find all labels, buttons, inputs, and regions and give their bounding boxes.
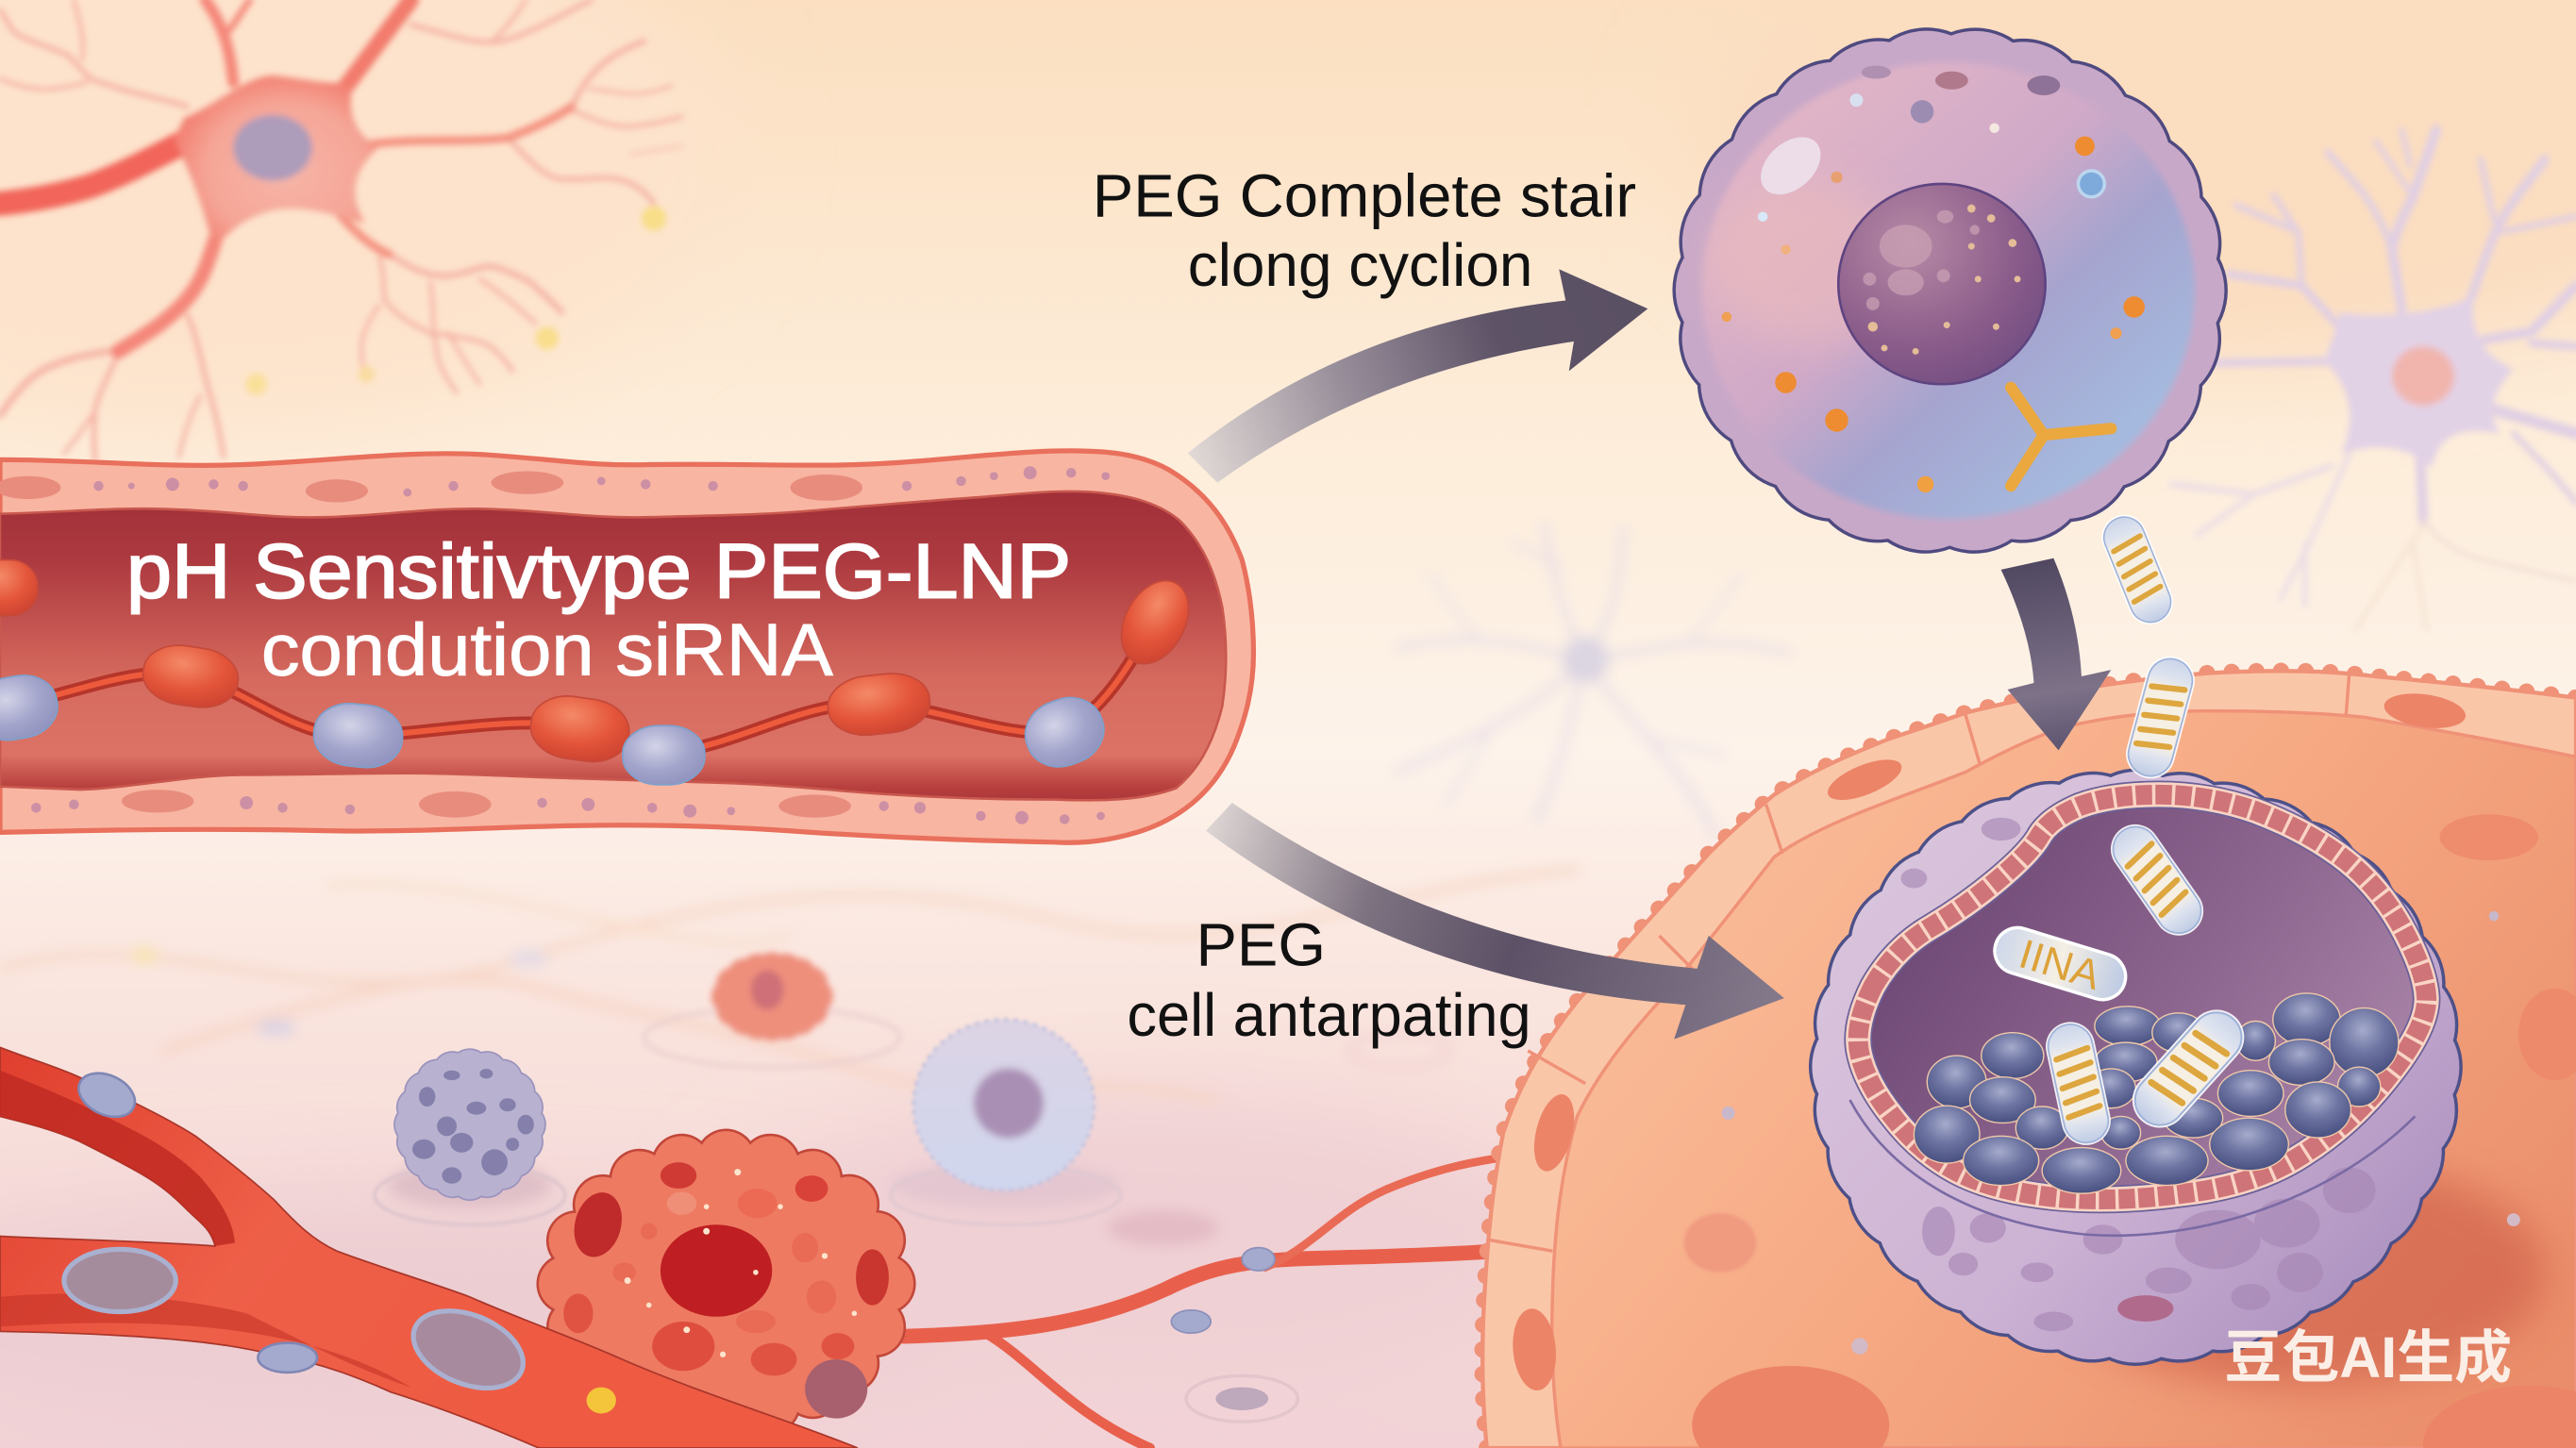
label: PEG cell antarpating: cell antarpating [1127,981,1531,1049]
vesicle outer wall [1856,818,2415,1331]
cell: orange background [644,960,900,1067]
capillary bubble [402,1296,534,1403]
organelles [1722,66,2145,492]
vesicle cavity [1858,794,2427,1200]
bead: blue [1016,688,1112,776]
vessel lumen [0,491,1226,800]
capsule: siRNA on spheres left [2041,1018,2116,1150]
vessel wall [0,451,1253,842]
capsule: siRNA on spheres right [2121,998,2255,1140]
capsule: siRNA in cavity [2101,815,2213,945]
cell: grey [375,1062,565,1224]
capillary bubble [64,1249,176,1312]
central pore [661,1224,772,1317]
membrane cell nuclei [1510,689,2538,1392]
bead: blue [0,670,62,746]
arrow: to target cell [1206,803,1784,1040]
main capillary [0,1047,858,1448]
bead: red [140,641,242,712]
cell body [1482,671,2576,1448]
target cell [1482,651,2576,1448]
arrow: to macrophage [1188,269,1648,483]
membrane scallops [1482,671,2576,1448]
siRNA strand [0,559,1202,785]
heading: condution siRNA [261,607,833,691]
label: PEG cell antarpating: PEG [1196,910,1326,978]
neuron: top left [0,0,682,459]
membrane dividers [1487,674,2350,1251]
cytoplasm [1552,711,2576,1448]
bead: red [1108,569,1202,675]
cell: red porous [561,1156,891,1419]
label: PEG Complete stair [1093,162,1636,299]
wall granules [31,466,1110,824]
capsule: siRNA with letters [1989,922,2132,1007]
tissue ground: blurred fibres [0,870,1577,1246]
capillary: right branch [904,1157,1503,1448]
Y-shaped receptor [2011,388,2111,486]
capsule: siRNA released [2095,508,2180,631]
neuron: faint centre [1397,525,1791,838]
lipid spheres [1914,993,2399,1193]
wall cell nuclei [0,471,862,818]
label: PEG Complete stair: PEG Complete stair [1093,162,1636,230]
bead: blue [310,700,406,771]
bead: red [826,670,932,739]
bead: red [527,691,633,767]
capsule: siRNA with letters: IINA [2014,932,2105,999]
bead: blue [623,725,705,785]
watermark: 豆包AI生成 [2224,1325,2512,1390]
vesicle lip line [1849,1100,2415,1236]
heading [126,529,1071,691]
bead: red [0,559,38,616]
yellow dot [587,1388,616,1413]
cell: pale round [891,1020,1120,1224]
arrow: downward to vesicle [2001,558,2111,750]
macrophage cell [1702,62,2195,519]
neuron: right [2172,129,2576,629]
capillary bead [258,1343,317,1373]
orange inclusions [1684,911,2576,1448]
label: PEG Complete stair: clong cyclion [1188,231,1532,299]
cytoplasm [1702,62,2195,519]
panel: blood vessel [0,451,1253,842]
shadow under vesicle [2053,1157,2547,1388]
heading: pH Sensitivtype PEG-LNP [126,529,1071,614]
label: PEG cell antarpating [1127,910,1531,1049]
capillary beads [72,1065,142,1125]
wall pores [1896,818,2376,1331]
capsule: siRNA crossing membrane [2120,651,2200,784]
nucleus [1838,184,2046,384]
cell pores [563,1162,889,1419]
